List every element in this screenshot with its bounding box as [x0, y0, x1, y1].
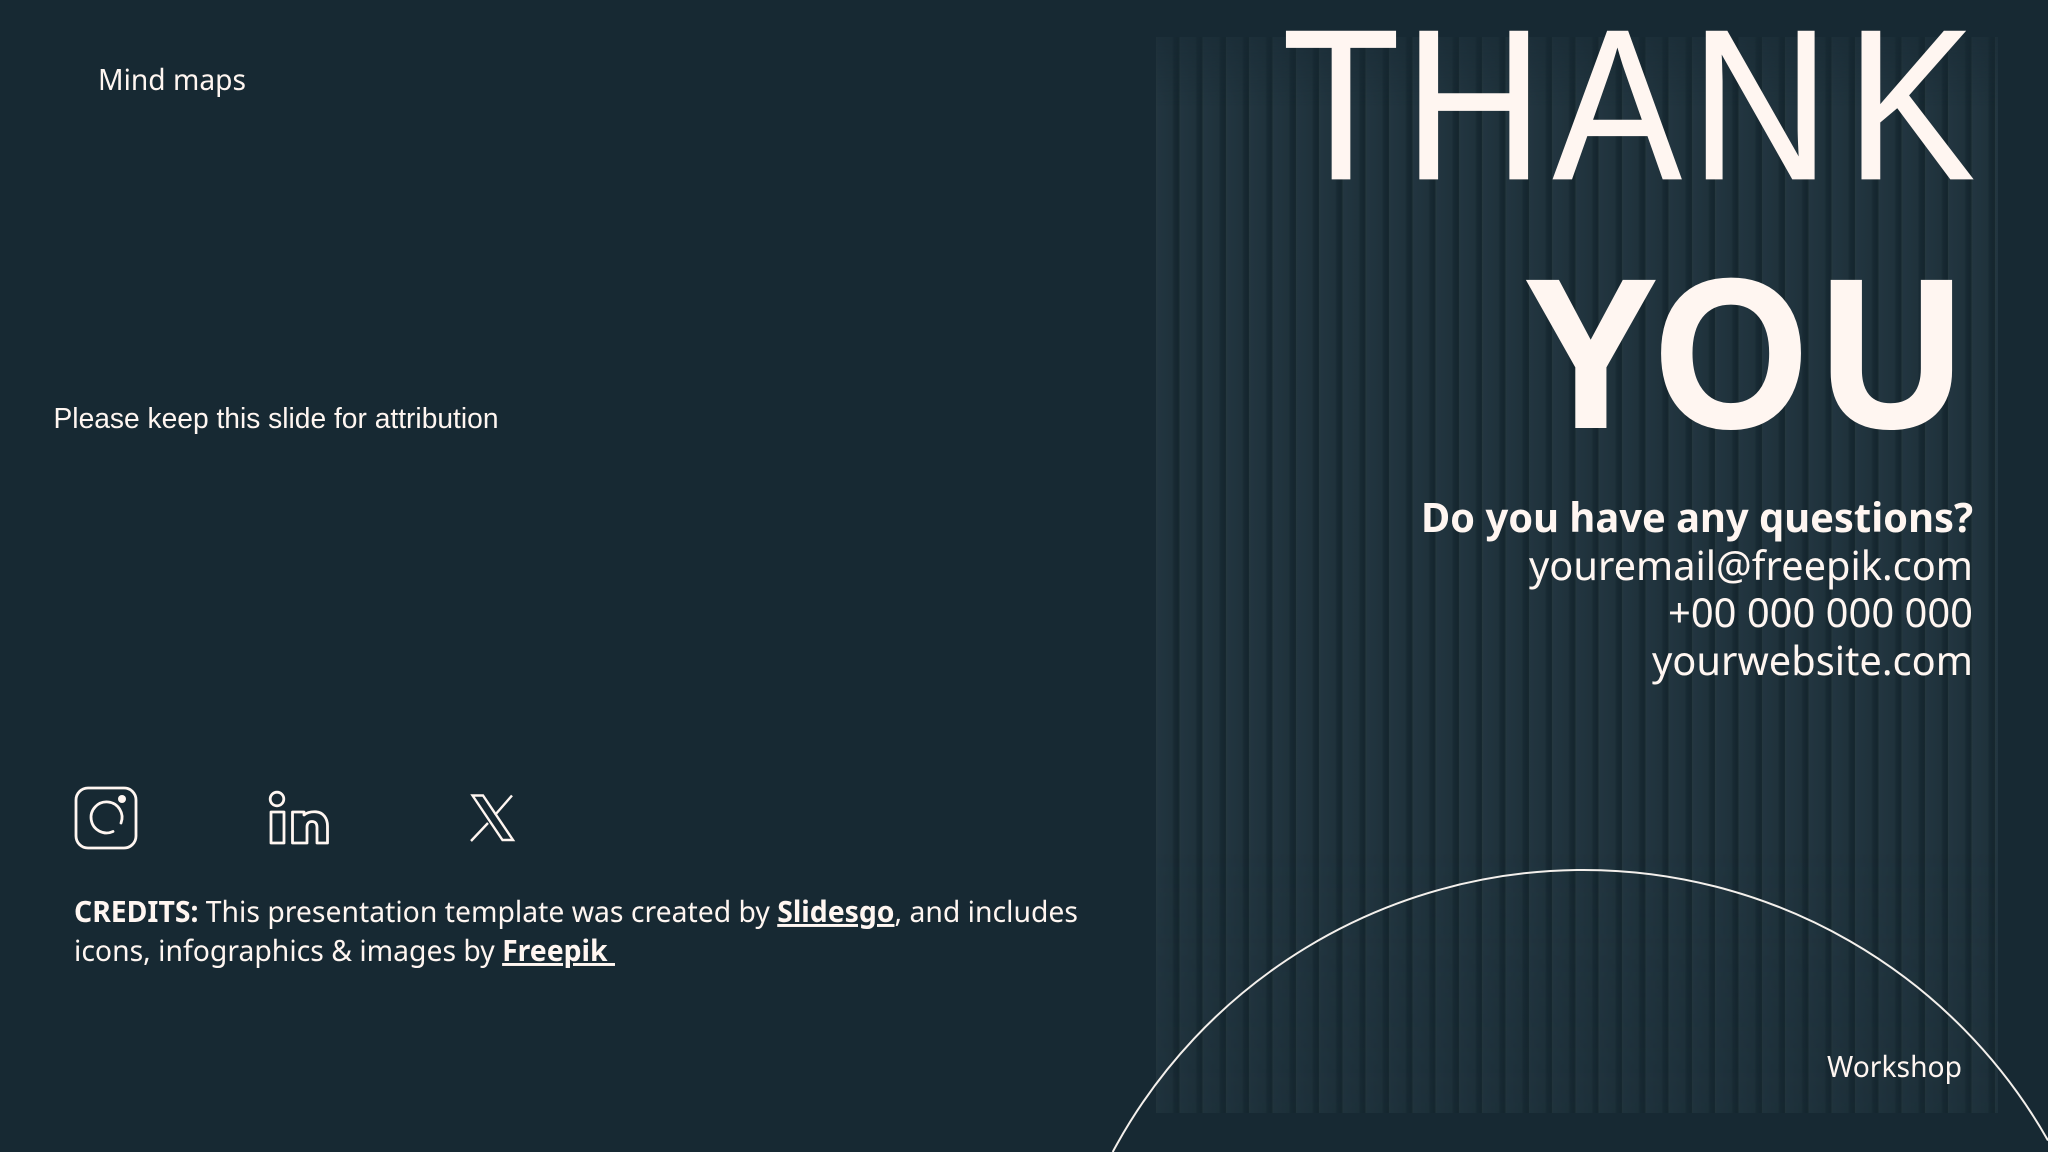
section label: mind maps: Mind maps	[98, 60, 246, 99]
icon: linkedin	[270, 792, 328, 843]
credits line one: CREDITS: This presentation template was created by Slidesgo, and includes	[74, 890, 1078, 931]
arc outline	[1113, 870, 2048, 1152]
icon: instagram	[76, 788, 136, 848]
icon: x	[471, 796, 513, 841]
title: you: YOU	[1525, 236, 1963, 472]
credits text	[74, 890, 1078, 970]
question heading: Do you have any questions?	[1421, 489, 1973, 544]
attribution note: Please keep this slide for attribution	[54, 403, 498, 435]
email: youremail@freepik.com	[1529, 537, 1973, 592]
contact block	[1421, 489, 1973, 687]
credits line two: icons, infographics & images by Freepik	[74, 929, 615, 970]
decorative striped panel	[1156, 37, 1998, 1113]
section label: workshop: Workshop	[1827, 1047, 1962, 1086]
phone: +00 000 000 000	[1668, 584, 1973, 639]
website: yourwebsite.com	[1652, 632, 1973, 687]
